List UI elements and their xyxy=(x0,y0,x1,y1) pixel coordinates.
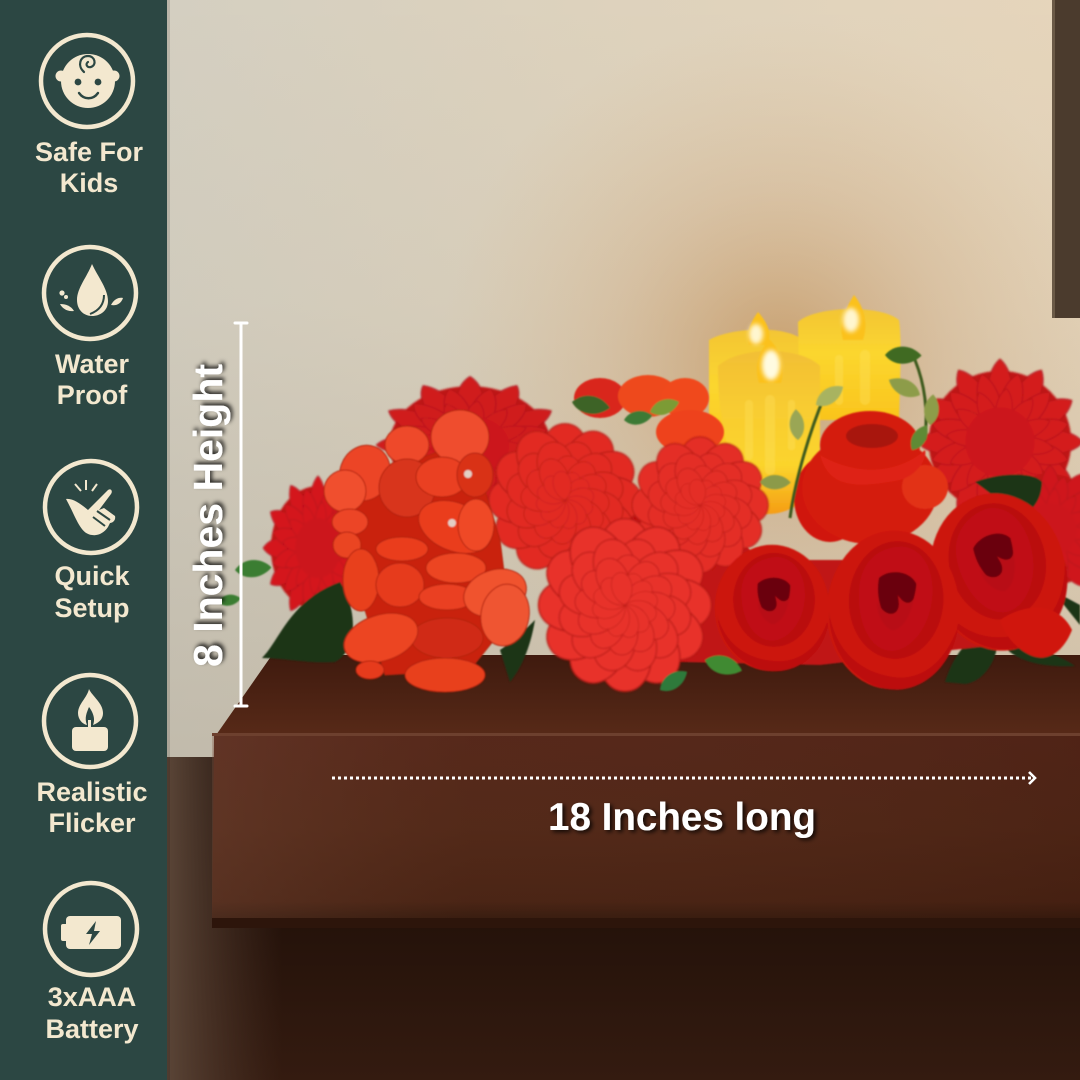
label: Battery xyxy=(45,1014,139,1044)
icon: candle flame xyxy=(44,675,136,767)
sidebar panel xyxy=(0,0,170,1080)
orange hydrangea xyxy=(324,410,534,692)
upper rose bud xyxy=(794,411,948,544)
middle chrysanthemums xyxy=(487,422,769,693)
icon: baby face xyxy=(41,35,133,127)
label: Quick xyxy=(54,561,130,591)
lower shelf and floor xyxy=(167,757,1080,1080)
icon: water drop xyxy=(44,247,136,339)
top orange flower xyxy=(574,375,724,454)
label: Flicker xyxy=(48,808,136,838)
bouquet of flowers xyxy=(218,344,1080,695)
height label: 8 Inches Height xyxy=(185,364,231,667)
feature: quick setup xyxy=(45,461,137,623)
length dimension arrow xyxy=(332,772,1035,784)
label: 3xAAA xyxy=(48,982,136,1012)
dark green leaves xyxy=(262,474,1080,684)
flame left xyxy=(748,312,769,345)
length label: 18 Inches long xyxy=(548,796,816,839)
feature: realistic flicker xyxy=(36,675,148,838)
feature: water proof xyxy=(44,247,136,410)
icon: battery xyxy=(45,883,137,975)
flame right xyxy=(841,295,865,340)
label: Realistic xyxy=(36,777,148,807)
front candle xyxy=(718,351,820,514)
label: Water xyxy=(55,349,129,379)
icon: finger snap hand xyxy=(45,461,137,553)
wooden table xyxy=(212,655,1080,928)
flame front xyxy=(757,339,783,383)
candle wax ribs xyxy=(745,350,870,475)
label: Kids xyxy=(60,168,118,198)
green sprigs and small leaves xyxy=(218,344,943,695)
feature: 3xAAA battery xyxy=(45,883,139,1044)
label: Setup xyxy=(54,593,130,623)
candles xyxy=(709,295,901,514)
back chrysanthemums xyxy=(261,356,1080,623)
photo background: wall xyxy=(167,0,1080,760)
feature: safe for kids xyxy=(35,35,144,198)
label: Safe For xyxy=(35,137,144,167)
height dimension line xyxy=(235,323,247,706)
base fill behind the flowers xyxy=(560,500,1040,665)
roses xyxy=(715,411,1080,695)
label: Proof xyxy=(57,380,128,410)
back-right candle xyxy=(798,309,901,420)
picture frame on wall xyxy=(1052,0,1080,318)
back-left candle xyxy=(709,330,800,470)
